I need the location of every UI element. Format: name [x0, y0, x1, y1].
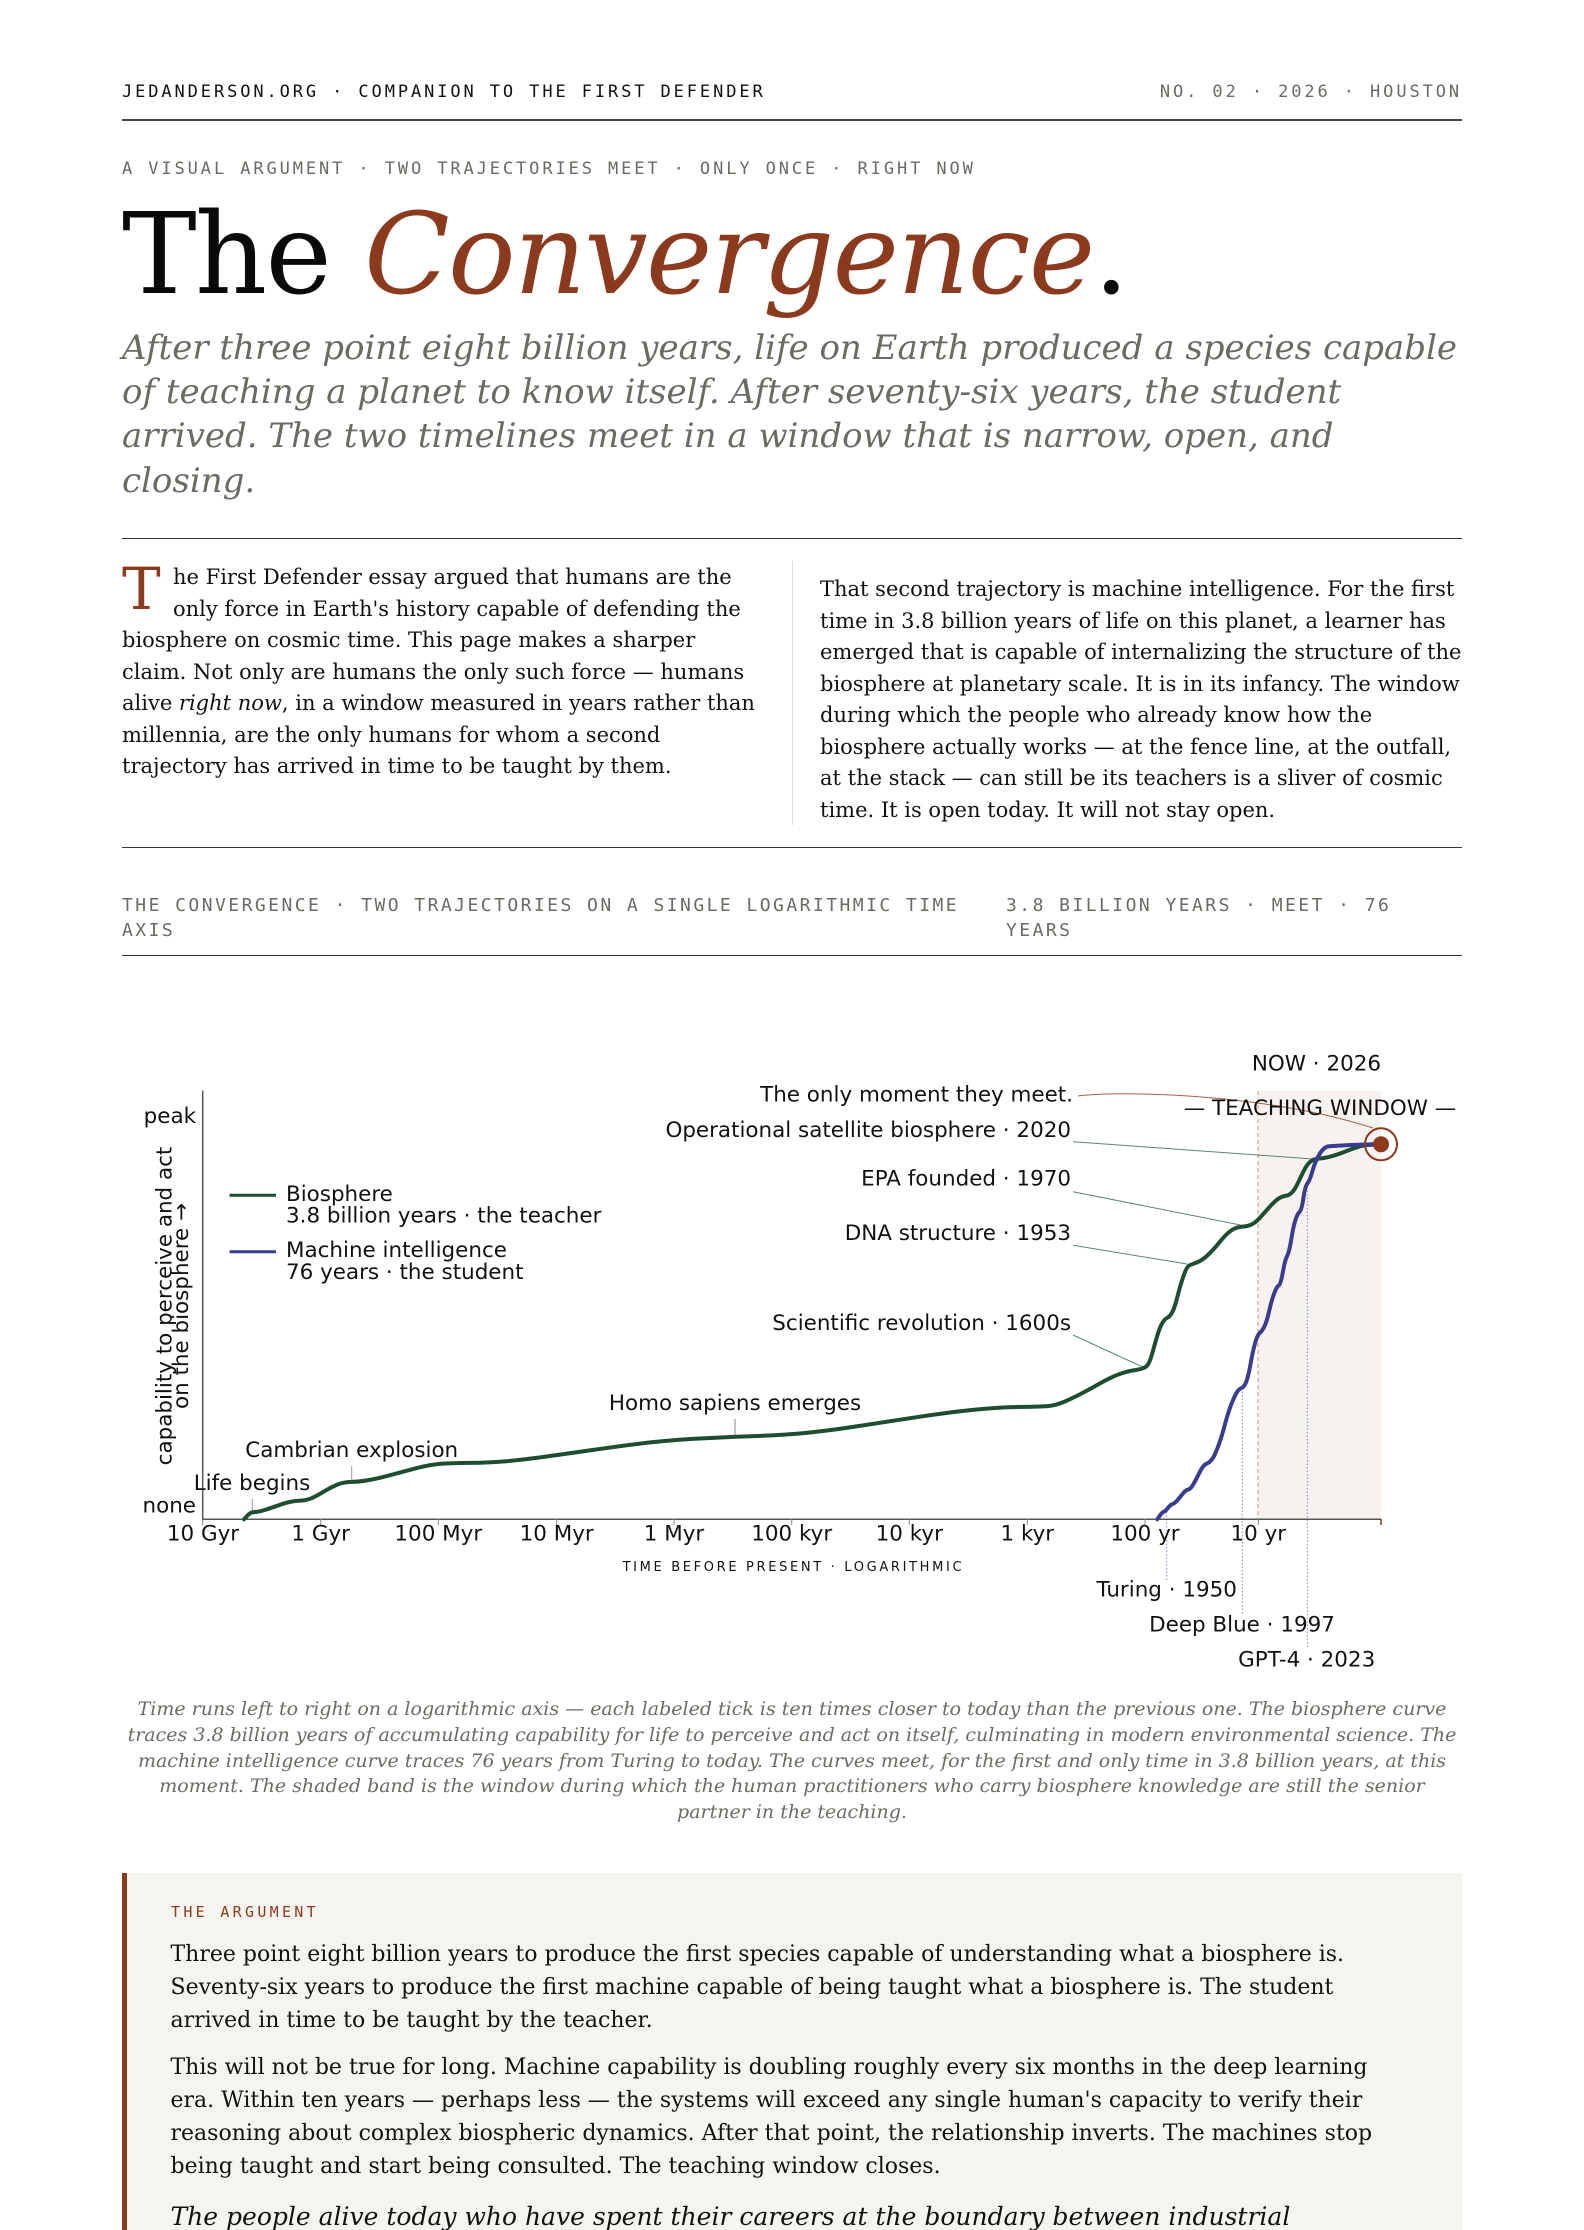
intro column right: time. It is open today. It will not stay open.: [820, 798, 1275, 822]
x axis title: TIME BEFORE PRESENT · LOGARITHMIC: [622, 1560, 964, 1575]
chart heading left: AXIS: [122, 920, 175, 941]
machine milestone labels: Turing · 1950: [1096, 1578, 1237, 1603]
masthead left: JEDANDERSON.ORG · COMPANION TO THE FIRST DEFENDER: [122, 82, 766, 102]
intro column left: biosphere on cosmic time. This page makes a sharper: [122, 628, 695, 652]
argument paragraph one: arrived in time to be taught by the teacher.: [170, 2008, 653, 2032]
masthead right: NO. 02 · 2026 · HOUSTON: [1160, 82, 1462, 102]
eyebrow: A VISUAL ARGUMENT · TWO TRAJECTORIES MEET · ONLY ONCE · RIGHT NOW: [122, 159, 976, 179]
argument paragraph two: reasoning about complex biospheric dynamics. After that point, the relationship inverts. The machines stop: [170, 2120, 1372, 2146]
chart caption: Time runs left to right on a logarithmic axis — each labeled tick is ten times closer to today than the previous one. The biosphere curve: [138, 1698, 1446, 1720]
argument paragraph one: Three point eight billion years to produce the first species capable of understanding what a biosphere is.: [170, 1942, 1344, 1966]
biosphere milestone labels: EPA founded · 1970: [861, 1167, 1071, 1192]
biosphere curve: [244, 1144, 1380, 1519]
argument paragraph one: [170, 1942, 1344, 2032]
intro column right: That second trajectory is machine intelligence. For the first: [820, 577, 1454, 601]
argument paragraph two: era. Within ten years — perhaps less — the systems will exceed any single human's capacity to verify their: [170, 2088, 1362, 2112]
subtitle: [119, 328, 1457, 501]
chart caption: [128, 1698, 1456, 1823]
y axis labels: peak: [144, 1104, 197, 1129]
chart heading right: 3.8 BILLION YEARS · MEET · 76: [1006, 895, 1391, 916]
subtitle: After three point eight billion years, life on Earth produced a species capable: [122, 328, 1457, 368]
drop cap: T: [122, 555, 161, 623]
legend: [230, 1182, 602, 1285]
y axis labels: none: [143, 1494, 196, 1519]
intro column right: [820, 577, 1461, 822]
biosphere milestone labels: Operational satellite biosphere · 2020: [665, 1118, 1071, 1143]
machine milestone labels: Deep Blue · 1997: [1149, 1613, 1335, 1638]
intro column right: during which the people who already know how the: [820, 703, 1372, 727]
intro column right: biosphere actually works — at the fence line, at the outfall,: [820, 734, 1451, 758]
x axis tick labels: 1 Myr: [644, 1522, 704, 1547]
legend: Machine intelligence: [286, 1238, 507, 1263]
chart caption: partner in the teaching.: [677, 1801, 907, 1823]
intro column right: emerged that is capable of internalizing the structure of the: [820, 640, 1461, 664]
argument paragraph two: This will not be true for long. Machine capability is doubling roughly every six months in the deep learning: [170, 2054, 1367, 2080]
x axis tick labels: 1 kyr: [1000, 1522, 1054, 1547]
subtitle: arrived. The two timelines meet in a window that is narrow, open, and: [122, 416, 1334, 456]
intro column left: he First Defender essay argued that humans are the: [173, 565, 732, 589]
now label: NOW · 2026: [1252, 1052, 1381, 1077]
chart heading left: [122, 895, 959, 941]
x axis tick labels: 10 yr: [1231, 1522, 1286, 1547]
intro column right: at the stack — can still be its teachers is a sliver of cosmic: [820, 766, 1443, 790]
intro column left: only force in Earth's history capable of defending the: [173, 596, 741, 620]
intro column left: millennia, are the only humans for whom a second: [122, 722, 660, 746]
subtitle: closing.: [122, 461, 255, 501]
meeting point callout curve: [1078, 1094, 1373, 1128]
chart caption: moment. The shaded band is the window during which the human practitioners who carry biosphere knowledge are still the senior: [159, 1775, 1425, 1797]
biosphere milestone labels: DNA structure · 1953: [845, 1221, 1071, 1246]
x axis tick labels: 10 Gyr: [167, 1522, 239, 1547]
teaching window label: — TEACHING WINDOW —: [1184, 1096, 1456, 1121]
x axis tick labels: 100 Myr: [394, 1522, 482, 1547]
chart: [143, 1052, 1456, 1673]
x axis tick labels: 10 kyr: [876, 1522, 943, 1547]
biosphere milestone labels: The only moment they meet.: [759, 1083, 1073, 1108]
legend: 76 years · the student: [286, 1260, 523, 1285]
argument paragraph two: [170, 2054, 1372, 2178]
argument label: THE ARGUMENT: [171, 1903, 319, 1921]
x axis tick labels: 1 Gyr: [291, 1522, 350, 1547]
biosphere milestone labels: Life begins: [194, 1471, 310, 1496]
y axis title: [152, 1147, 194, 1465]
legend: Biosphere: [286, 1182, 393, 1207]
column divider: [792, 561, 793, 825]
panel: the argument: [122, 1873, 1462, 2230]
machine milestone labels: [1096, 1578, 1375, 1673]
argument paragraph three: The people alive today who have spent their careers at the boundary between industrial: [170, 2202, 1290, 2230]
title: The Convergence.: [122, 190, 1127, 320]
argument paragraph two: being taught and start being consulted. The teaching window closes.: [170, 2154, 941, 2178]
y axis labels: [143, 1104, 197, 1519]
subtitle: of teaching a planet to know itself. After seventy-six years, the student: [122, 372, 1341, 412]
chart heading left: THE CONVERGENCE · TWO TRAJECTORIES ON A SINGLE LOGARITHMIC TIME: [122, 895, 959, 916]
intro column right: biosphere at planetary scale. It is in its infancy. The window: [820, 672, 1460, 696]
convergence marker: [1365, 1128, 1397, 1160]
x axis tick labels: [167, 1522, 1286, 1547]
machine intelligence curve: [1157, 1144, 1380, 1519]
annotation leader lines: [252, 1142, 1313, 1649]
intro column left: claim. Not only are humans the only such force — humans: [122, 660, 744, 684]
machine milestone labels: GPT-4 · 2023: [1238, 1648, 1375, 1673]
intro column left: [122, 555, 755, 778]
chart caption: machine intelligence curve traces 76 years from Turing to today. The curves meet, for the first and only time in 3.8 billion years, at this: [138, 1750, 1446, 1772]
intro column left: alive right now, in a window measured in years rather than: [122, 691, 755, 715]
chart heading right: [1006, 895, 1391, 941]
x axis tick labels: 10 Myr: [520, 1522, 594, 1547]
intro column right: time in 3.8 billion years of life on this planet, a learner has: [820, 608, 1446, 632]
x axis tick labels: 100 kyr: [751, 1522, 832, 1547]
biosphere milestone labels: [194, 1083, 1073, 1496]
legend: 3.8 billion years · the teacher: [286, 1204, 602, 1229]
intro column left: trajectory has arrived in time to be taught by them.: [122, 754, 672, 778]
argument paragraph one: Seventy-six years to produce the first machine capable of being taught what a biosphere is. The student: [170, 1974, 1333, 2000]
teaching window band: [1258, 1091, 1381, 1519]
biosphere milestone labels: Scientific revolution · 1600s: [772, 1311, 1071, 1336]
chart caption: traces 3.8 billion years of accumulating capability for life to perceive and act on itself, culminating in modern environmental science. The: [128, 1724, 1456, 1746]
biosphere milestone labels: Homo sapiens emerges: [609, 1391, 861, 1416]
y axis title: capability to perceive and act: [152, 1147, 177, 1465]
chart heading right: YEARS: [1006, 920, 1072, 941]
axes: [202, 1090, 1381, 1525]
y axis title: on the biosphere →: [169, 1203, 194, 1409]
biosphere milestone labels: Cambrian explosion: [245, 1438, 458, 1463]
x axis tick labels: 100 yr: [1110, 1522, 1180, 1547]
